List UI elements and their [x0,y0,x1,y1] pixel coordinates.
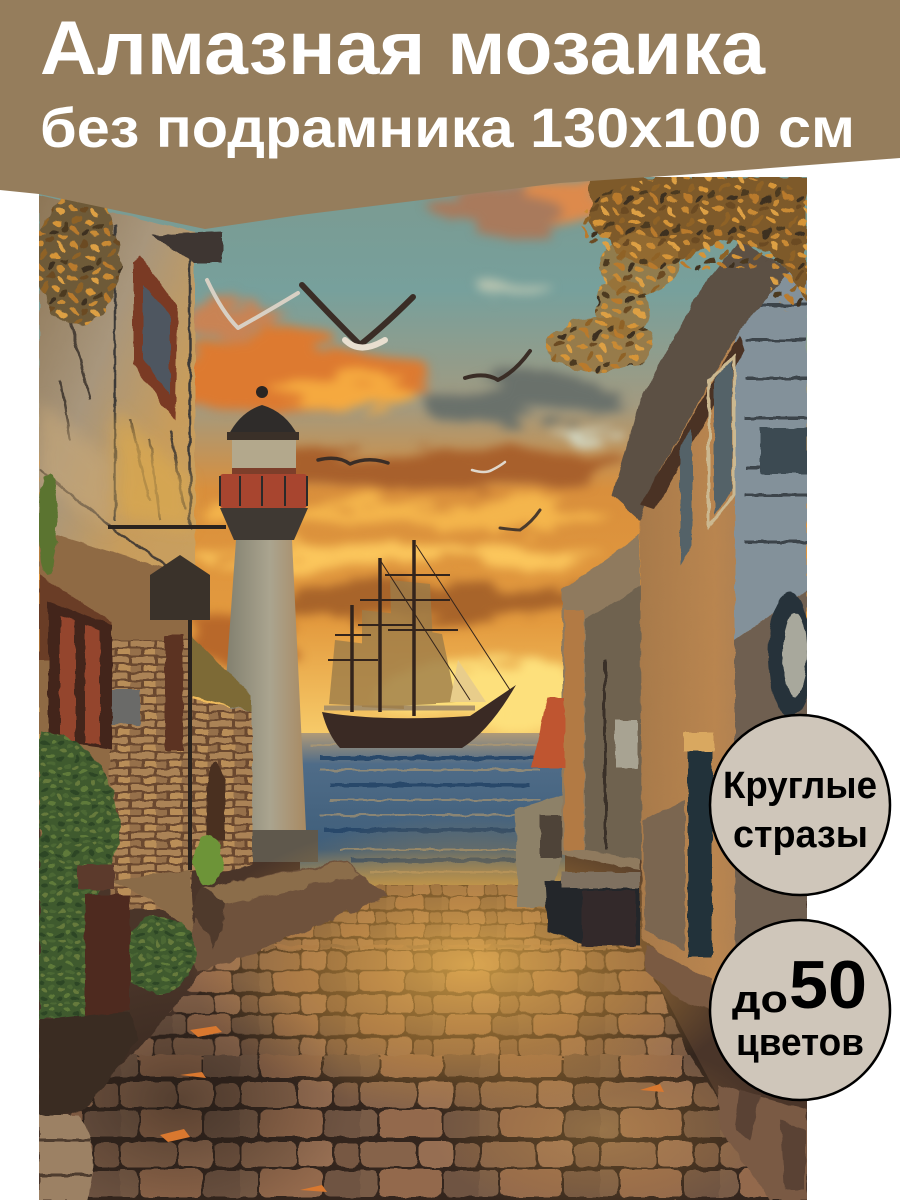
sky [39,177,807,747]
badge: round rhinestones: Круглые [723,765,877,807]
badge: up to 50 colours: цветов [736,1022,864,1064]
header ribbon [0,0,900,229]
title: Алмазная мозаика [40,6,766,91]
badge: up to 50 colours [710,920,890,1100]
foreground stones and barrel [39,1085,807,1200]
badge: up to 50 colours: 50 [789,947,867,1023]
painting: harbour street at sunset [10,174,830,1200]
autumn tree [548,174,830,373]
lower window [48,602,112,750]
badge: round rhinestones: стразы [733,814,868,856]
hanging sign [108,527,226,870]
barrels and crates [545,872,640,946]
seagulls [207,280,540,530]
badge: round rhinestones [710,715,890,895]
lighthouse [220,386,318,862]
upper window [133,255,178,420]
sailing ship [322,540,516,748]
left foliage [36,194,223,1020]
road [70,823,782,1200]
right far buildings [515,535,642,908]
subtitle: без подрамника 130х100 см [40,96,855,159]
stone wall along the quay [185,860,385,973]
badge: up to 50 colours: до [732,979,788,1021]
planter and door [39,865,138,1120]
sea [300,733,565,888]
left stone buildings [39,195,252,935]
right house [612,240,812,1020]
